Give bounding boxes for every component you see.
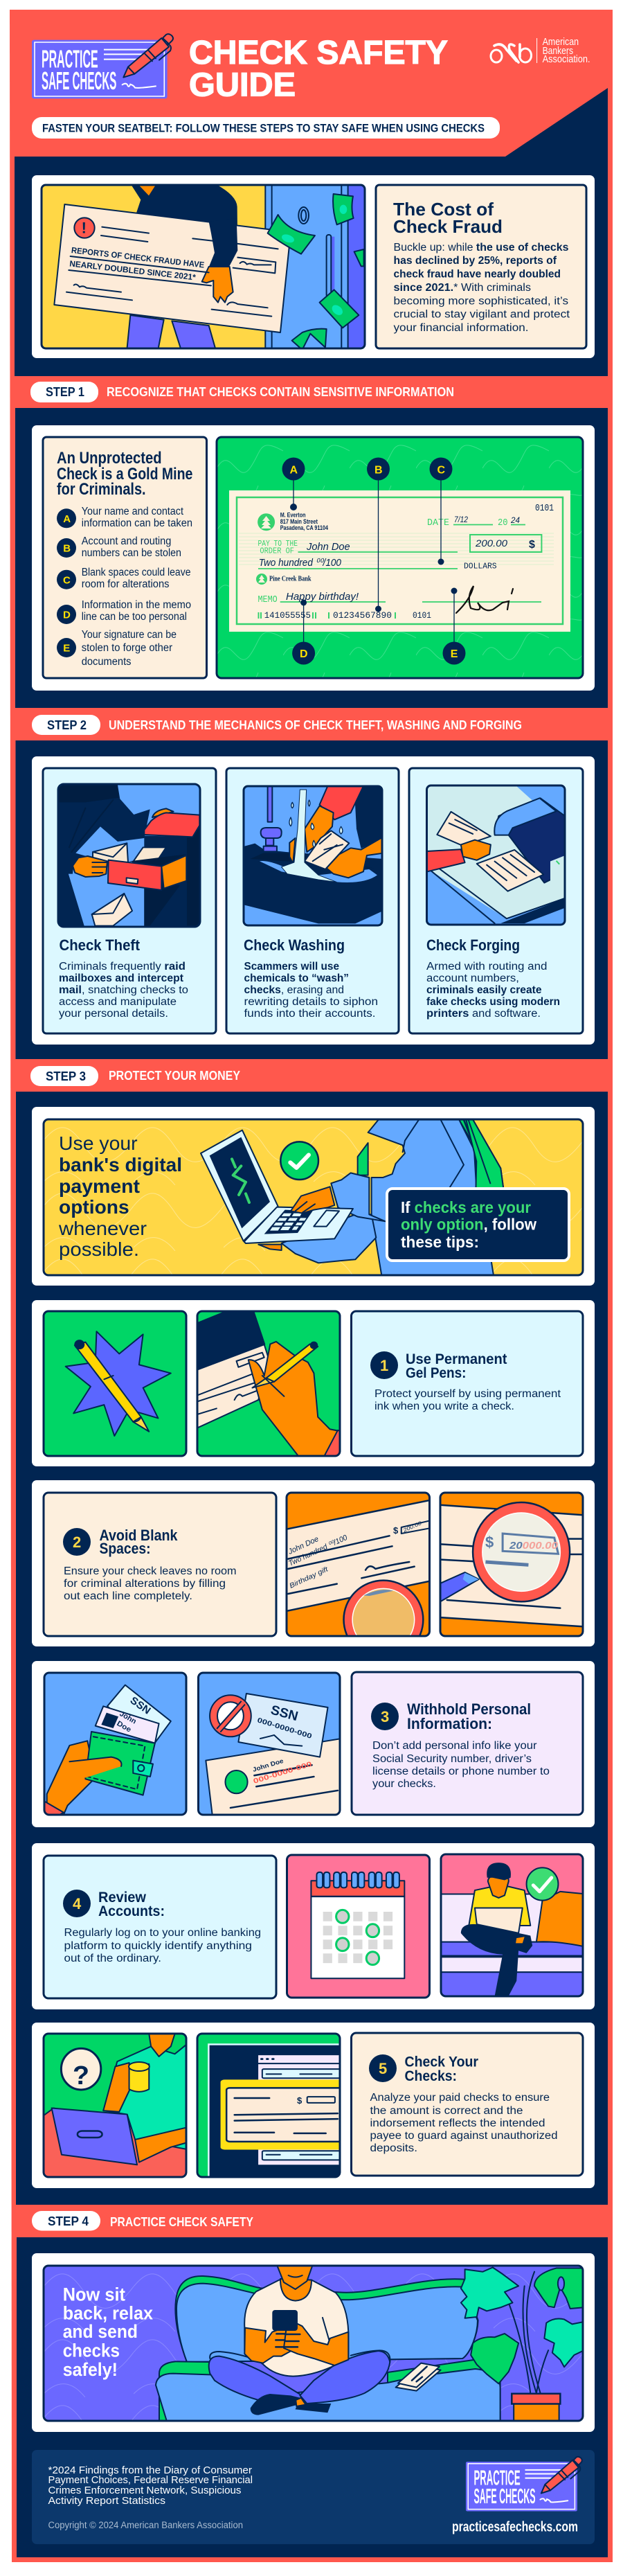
footer panel [32, 2450, 595, 2544]
panel: check forging: account numbers, [426, 972, 519, 984]
step 4 heading: STEP 4 [48, 2214, 89, 2228]
check body: 24 [510, 515, 520, 525]
illustration: wallet with SSN card: SSN [128, 1694, 153, 1717]
panel: gold mine list: An Unprotected [57, 449, 162, 468]
panel: gold mine list: B [63, 543, 71, 554]
check body: DATE [427, 517, 449, 528]
text panel: tip 5: Check Your [404, 2054, 478, 2070]
illustration: person on couch with laptop [439, 1854, 586, 2000]
intro section [15, 88, 608, 376]
text: use your bank's digital payment options: Use your [59, 1132, 138, 1154]
text panel: tip 4: Review [98, 1890, 147, 1906]
text: now sit back, relax and send checks safely: back, relax [63, 2302, 153, 2323]
panel: the cost of check fraud: has declined by 25%, reports of [393, 255, 557, 267]
panel: gold mine list: E [63, 643, 70, 654]
illustration: gel pen on star [44, 1311, 186, 1456]
text panel: tip 5: the amount is correct and the [370, 2105, 523, 2117]
panel: check washing [226, 768, 399, 1033]
illustration: fully filled check: 200.00 [401, 1520, 423, 1534]
illustration: wallet with SSN card [44, 1673, 186, 1817]
text panel: tip 2: Spaces: [100, 1540, 151, 1557]
white card [32, 756, 595, 1045]
check body: Pine Creek Bank [269, 575, 312, 583]
panel: check theft [43, 768, 216, 1033]
illustration: wallet with SSN card: Doe [115, 1719, 133, 1734]
navy background with diagonal [15, 88, 608, 376]
illustration: mailbox theft [57, 784, 201, 927]
panel: annotated check [217, 437, 583, 678]
check body: DOLLARS [464, 562, 497, 571]
panel: gold mine list: Information in the memo [82, 599, 191, 611]
text panel: tip 5: Checks: [404, 2068, 457, 2084]
panel: check washing: chemicals to “wash” [244, 972, 349, 984]
text panel: tip 4: Accounts: [98, 1903, 165, 1919]
callout: if checks are your only option: these tips: [401, 1233, 479, 1251]
text panel: tip 3: your checks. [372, 1778, 436, 1790]
panel: check theft: access and manipulate [59, 996, 177, 1008]
header logo: Practice Safe Checks [32, 34, 173, 98]
step 2 section [15, 740, 608, 1059]
text panel: tip 2: for criminal alterations by filling [64, 1578, 226, 1590]
step 4 heading: PRACTICE CHECK SAFETY [110, 2215, 253, 2229]
footnote [48, 2464, 253, 2507]
step 4 heading [32, 2211, 253, 2230]
subtitle pill [32, 117, 500, 139]
panel: the cost of check fraud: Buckle up: while the use of checks [393, 242, 569, 254]
illustration: magnified altered amount [439, 1493, 584, 1636]
panel: the cost of check fraud: check fraud have nearly doubled [393, 269, 561, 280]
text panel: tip 1 [352, 1311, 583, 1456]
panel: the cost of check fraud: The Cost of [393, 199, 494, 220]
check body: 20 [498, 517, 508, 528]
illustration: hand writing a check [195, 1311, 344, 1461]
card: tip 5 check your checks [32, 2023, 595, 2188]
callout pointers [294, 469, 454, 653]
illustration: fully filled check: Two hundred ⁰⁰/100 [287, 1534, 349, 1568]
step 3 heading: PROTECT YOUR MONEY [109, 1069, 240, 1083]
illustration: SSN on check prohibited: John Doe [252, 1757, 285, 1773]
step 2 heading [32, 715, 522, 735]
footnote: Activity Report Statistics [48, 2495, 165, 2507]
step 1 section [15, 408, 608, 708]
panel: the cost of check fraud: since 2021. * With criminals [393, 282, 531, 294]
step 3 heading: STEP 3 [46, 1069, 86, 1083]
text panel: tip 4 [44, 1856, 276, 1998]
website url: practicesafechecks.com [452, 2520, 578, 2535]
illustration: person using laptop [201, 1120, 504, 1277]
panel: the cost of check fraud [376, 185, 586, 348]
check body: 817 Main Street [280, 518, 318, 525]
callout: if checks are your only option: If checks are your [401, 1198, 531, 1216]
step 1 heading [30, 382, 454, 402]
card: digital payment options [32, 1107, 595, 1286]
panel: the cost of check fraud: crucial to stay vigilant and protect [393, 309, 570, 320]
check body: M. Everton [280, 512, 306, 519]
panel: check forging [409, 768, 583, 1033]
white card [32, 425, 595, 691]
text panel: tip 1: Gel Pens: [406, 1365, 467, 1381]
American Bankers Association logo: Association. [543, 53, 590, 65]
footnote: Crimes Enforcement Network, Suspicious [48, 2485, 241, 2496]
illustration: SSN on check prohibited: SSN [269, 1703, 300, 1724]
text panel: tip 2: Avoid Blank [100, 1527, 178, 1544]
text: now sit back, relax and send checks safely: safely! [63, 2359, 118, 2380]
panel: gold mine list: A [63, 513, 71, 525]
text panel: tip 3: Information: [407, 1715, 492, 1732]
copyright: Copyright © 2024 American Bankers Association [48, 2520, 243, 2530]
panel: gold mine list: Account and routing [82, 535, 171, 547]
panel: gold mine list [43, 437, 206, 678]
illustration: SSN on check prohibited: 000-0000-000 [256, 1716, 313, 1741]
footnote: *2024 Findings from the Diary of Consumer [48, 2464, 252, 2476]
illustration: fully filled check: $ [393, 1525, 399, 1536]
text panel: tip 5: payee to guard against unauthorized [370, 2130, 558, 2142]
check body: 7/12 [454, 515, 468, 524]
panel: gold mine list: information can be taken [82, 517, 192, 529]
illustration: washing a check in a sink [244, 786, 383, 925]
text panel: tip 1: 1 [380, 1357, 388, 1374]
illustration frame [42, 185, 365, 348]
navy background [15, 740, 608, 1059]
panel: check washing: Check Washing [244, 936, 345, 954]
text panel: tip 3: Withhold Personal [407, 1700, 531, 1718]
illustration: person with mug and laptop: ? [73, 2061, 89, 2090]
check body: Two hundred ⁰⁰/100 [259, 557, 342, 569]
panel: check theft: Criminals frequently raid [59, 961, 186, 972]
illustration: forging a check at a printer [425, 785, 568, 925]
check body: Pasadena, CA 91104 [280, 524, 328, 531]
callout: if checks are your only option [387, 1189, 569, 1261]
panel: gold mine list: Blank spaces could leave [82, 567, 191, 578]
check body: John Doe [306, 541, 350, 553]
panel: gold mine list: Check is a Gold Mine [57, 465, 192, 483]
footer logo: SAFE CHECKS [473, 2485, 536, 2508]
check body: PAY TO THE [258, 539, 298, 549]
text panel: tip 3 [352, 1672, 583, 1815]
header logo: Practice Safe Checks: PRACTICE [42, 44, 98, 73]
illustration: calendar [287, 1855, 429, 1998]
illustration: SSN on check prohibited: 000-0000-000 [253, 1760, 314, 1786]
text panel: tip 1: ink when you write a check. [374, 1401, 514, 1412]
text panel: tip 4: 4 [73, 1895, 82, 1912]
panel: check theft: your personal details. [59, 1008, 168, 1020]
American Bankers Association logo: Bankers [543, 45, 573, 57]
callout: if checks are your only option: only option, follow [401, 1215, 536, 1233]
panel: annotated check: C [437, 464, 446, 477]
text: use your bank's digital payment options: whenever [58, 1218, 147, 1239]
American Bankers Association logo [491, 36, 590, 65]
panel: check forging: fake checks using modern [426, 996, 560, 1008]
text: now sit back, relax and send checks safely [63, 2284, 153, 2380]
text panel: tip 5: deposits. [370, 2142, 417, 2154]
panel: annotated check: D [300, 648, 308, 660]
text panel: tip 5: indorsement reflects the intended [370, 2117, 545, 2129]
check body: ORDER OF [260, 547, 294, 556]
illustration: SSN on check prohibited [198, 1673, 342, 1817]
step 3 section [16, 1092, 608, 2205]
panel: check theft: mailboxes and intercept [59, 972, 183, 984]
title [189, 35, 448, 104]
illustration: fully filled check [288, 1493, 428, 1635]
footnote: Payment Choices, Federal Reserve Financial [48, 2474, 253, 2486]
text panel: tip 2: Ensure your check leaves no room [64, 1565, 237, 1577]
text panel: tip 5: 5 [379, 2060, 387, 2077]
title: GUIDE [189, 66, 296, 104]
illustration: online check image on screen: $ [297, 2095, 303, 2106]
text panel: tip 4: Regularly log on to your online banking [64, 1927, 261, 1939]
illustration: magnified altered amount: $ [485, 1534, 494, 1551]
illustration: person with mug and laptop [42, 2034, 189, 2178]
text panel: tip 4: platform to quickly identify anything [64, 1940, 252, 1952]
subtitle pill: FASTEN YOUR SEATBELT: FOLLOW THESE STEPS TO STAY SAFE WHEN USING CHECKS [42, 122, 485, 134]
check body: $ [529, 539, 535, 551]
illustration: fully filled check: John Doe [287, 1535, 320, 1556]
title: CHECK SAFETY [189, 35, 448, 71]
hero illustration: man holding oversized check: REPORTS OF CHECK FRAUD HAVE [71, 245, 205, 270]
text panel: tip 2: 2 [73, 1534, 81, 1551]
check body: 0101 [535, 503, 554, 514]
step 4 section [17, 2237, 608, 2557]
panel: check washing: funds into their accounts. [244, 1008, 375, 1020]
panel: check forging: criminals easily create [426, 984, 542, 996]
panel: check washing: checks, erasing and [244, 984, 344, 996]
hero illustration: man holding oversized check: ! [82, 220, 87, 237]
text panel: tip 2 [44, 1493, 276, 1636]
panel: gold mine list: D [63, 610, 71, 621]
panel: annotated check: A [289, 464, 298, 477]
footer logo: PRACTICE [473, 2467, 521, 2490]
text panel: tip 1: Protect yourself by using permanent [374, 1388, 561, 1400]
illustration: wallet with SSN card: John [118, 1709, 138, 1726]
panel: check washing: rewriting details to siphon [244, 996, 378, 1008]
hero illustration: man holding oversized check [42, 184, 367, 350]
panel: annotated check: B [374, 464, 383, 477]
text panel: tip 3: Social Security number, driver’s [372, 1753, 532, 1765]
text panel: tip 5 [352, 2033, 583, 2176]
text: use your bank's digital payment options: options [59, 1196, 129, 1218]
panel: check forging: Armed with routing and [426, 961, 547, 972]
American Bankers Association logo: American [543, 36, 579, 48]
text: now sit back, relax and send checks safely: and send [63, 2321, 138, 2342]
text: use your bank's digital payment options: payment [59, 1175, 140, 1197]
navy background [16, 1092, 608, 2205]
step 1 heading: RECOGNIZE THAT CHECKS CONTAIN SENSITIVE INFORMATION [107, 385, 454, 399]
panel: the cost of check fraud: Check Fraud [393, 216, 503, 237]
panel: check forging: Check Forging [426, 936, 520, 954]
step 2 heading: UNDERSTAND THE MECHANICS OF CHECK THEFT, WASHING AND FORGING [109, 718, 522, 732]
panel: gold mine list: room for alterations [82, 578, 170, 590]
white card [32, 175, 595, 358]
text panel: tip 2: out each line completely. [64, 1590, 192, 1602]
card: tip 3 withhold personal information [32, 1661, 595, 1827]
illustration: online check image on screen [198, 2035, 339, 2176]
panel: check theft: Check Theft [60, 936, 141, 954]
step 3 heading [30, 1066, 240, 1086]
check body: 141055555 [264, 610, 311, 621]
illustration: magnified altered amount: 20000.00 [509, 1540, 559, 1552]
check body: 01234567890 [333, 610, 392, 621]
panel: annotated check: E [451, 648, 458, 660]
card: sit back and relax [32, 2253, 595, 2432]
panel: the cost of check fraud: your financial information. [393, 322, 529, 334]
step 2 heading: STEP 2 [47, 718, 87, 732]
text: use your bank's digital payment options [58, 1132, 182, 1260]
panel: gold mine list: Your name and contact [82, 506, 184, 517]
panel: gold mine list: Your signature can be [82, 629, 177, 641]
panel: check forging: printers and software. [426, 1008, 541, 1020]
text panel: tip 4: out of the ordinary. [64, 1953, 161, 1964]
navy background [15, 408, 608, 708]
check body: 0101 [413, 610, 431, 621]
check body [229, 490, 570, 632]
panel: gold mine list: documents [82, 656, 132, 668]
card: tip 4 review accounts [32, 1843, 595, 2009]
panel: the cost of check fraud: becoming more sophisticated, it’s [393, 295, 568, 308]
text: use your bank's digital payment options: bank's digital [59, 1154, 182, 1175]
check body: MEMO [258, 594, 278, 605]
hero illustration: man holding oversized check: NEARLY DOUBLED SINCE 2021* [69, 258, 197, 282]
text: use your bank's digital payment options: possible. [59, 1238, 139, 1260]
text: now sit back, relax and send checks safely: Now sit [63, 2284, 125, 2305]
header logo: Practice Safe Checks: SAFE CHECKS [42, 66, 116, 95]
text panel: tip 5: Analyze your paid checks to ensure [370, 2092, 550, 2104]
step 1 heading: STEP 1 [46, 385, 84, 399]
text panel: tip 3: 3 [381, 1708, 389, 1725]
panel: gold mine list: line can be too personal [82, 611, 187, 623]
navy background [17, 2237, 608, 2557]
text panel: tip 1: Use Permanent [406, 1351, 507, 1367]
text panel: tip 3: license details or phone number to [372, 1766, 550, 1777]
panel: gold mine list: stolen to forge other [82, 642, 172, 654]
card: tip 2 avoid blank spaces [32, 1480, 595, 1659]
check body: 200.00 [475, 538, 507, 549]
text: now sit back, relax and send checks safely: checks [63, 2340, 120, 2361]
panel: gold mine list: for Criminals. [57, 480, 146, 499]
panel: check theft: mail, snatching checks to [59, 984, 188, 996]
illustration: fully filled check: Birthday gift [289, 1565, 330, 1590]
text panel: tip 3: Don’t add personal info like your [372, 1740, 537, 1752]
panel: check washing: Scammers will use [244, 961, 339, 972]
panel: gold mine list: C [63, 574, 71, 586]
illustration: person relaxing on sofa [156, 2265, 584, 2426]
card: tip 1 permanent gel pens [32, 1300, 595, 1466]
panel: gold mine list: numbers can be stolen [82, 547, 181, 559]
check body: Happy birthday! [286, 591, 359, 603]
footer logo [466, 2457, 582, 2511]
